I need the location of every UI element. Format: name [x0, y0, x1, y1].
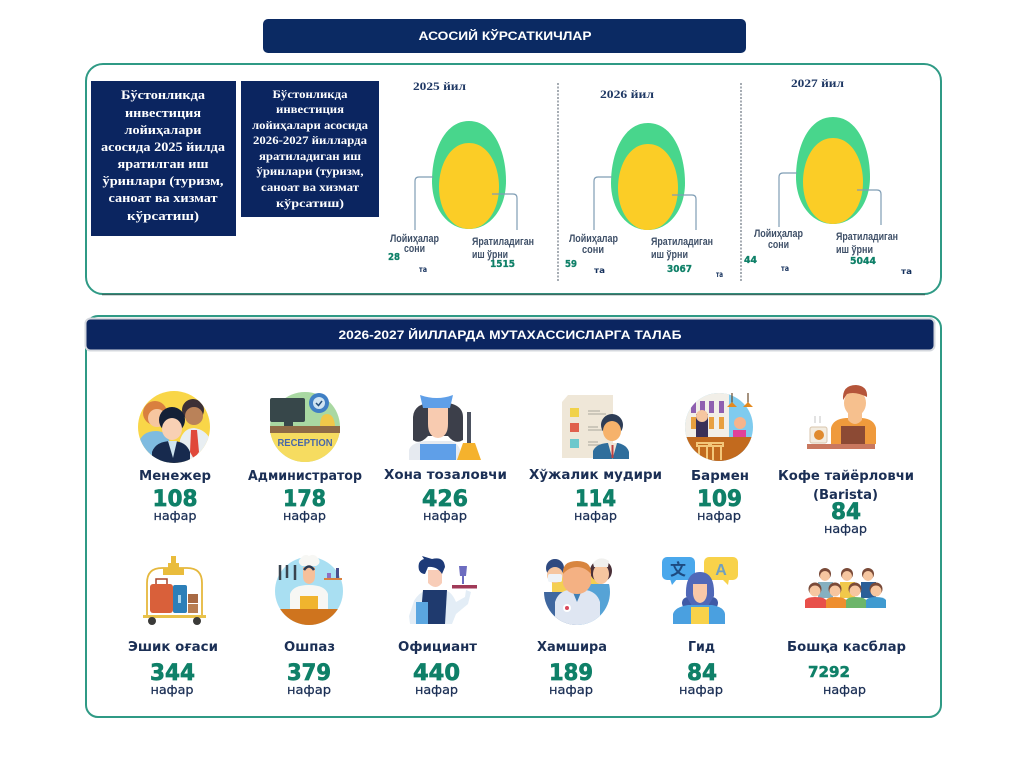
- label: Администратор: [248, 469, 362, 484]
- chart: 2026: 2026 йил: [600, 87, 654, 101]
- label: second line: (Barista): [813, 488, 878, 503]
- count: 426: [422, 487, 468, 512]
- label: Официант: [398, 640, 477, 655]
- unit: нафар: [287, 683, 331, 697]
- text box: 2025 jobs created: яратилган иш: [118, 156, 209, 171]
- card: housekeeper: [384, 395, 507, 523]
- card: manager: [138, 391, 212, 523]
- card: doorman: [128, 556, 218, 697]
- icon: translator: A: [715, 562, 727, 579]
- text box: 2026-2027 jobs planned: кўрсатиш): [276, 196, 344, 210]
- label: Хўжалик мудири: [529, 468, 662, 483]
- icon: managers: [138, 391, 210, 463]
- chart: 2026: сони: [582, 244, 604, 256]
- unit: нафар: [823, 683, 866, 697]
- chart: 2027: Яратиладиган: [836, 231, 898, 243]
- chart: 2026: иш ўрни: [651, 249, 688, 261]
- card: guide: [662, 556, 738, 697]
- count: 108: [152, 487, 198, 512]
- chart: 2027: 2027 йил: [791, 76, 844, 90]
- title bar: [263, 19, 746, 53]
- unit: нафар: [423, 509, 467, 523]
- chart: 2025: 28: [388, 252, 400, 263]
- panel: specialist demand: [86, 316, 941, 717]
- chart: 2025: та: [419, 265, 427, 274]
- count: 189: [549, 661, 593, 686]
- unit: нафар: [283, 509, 326, 523]
- icon: chef: [275, 555, 343, 627]
- text box: 2026-2027 jobs planned: [241, 81, 379, 217]
- chart: 2025: [388, 79, 534, 274]
- chart: 2026: Яратиладиган: [651, 236, 713, 248]
- card: barista: [778, 385, 914, 536]
- card: cook: [275, 555, 343, 697]
- icon: translator: [662, 556, 738, 624]
- section header: [86, 318, 934, 350]
- chart: 2026: 3067: [667, 264, 692, 275]
- unit: нафар: [549, 683, 593, 697]
- unit: нафар: [150, 683, 194, 697]
- text box: 2026-2027 jobs planned: инвестиция: [276, 102, 345, 116]
- card: household manager: [529, 395, 662, 523]
- count: 109: [697, 487, 742, 512]
- label: Менежер: [139, 469, 211, 484]
- card: waiter: [398, 556, 477, 697]
- chart: 2025: иш ўрни: [472, 249, 508, 261]
- chart: 2026: 59: [565, 259, 577, 270]
- chart: 2025: 2025 йил: [413, 79, 466, 93]
- section header: 2026-2027 ЙИЛЛАРДА МУТАХАССИСЛАРГА ТАЛАБ: [338, 327, 682, 342]
- chart: 2027: 5044: [850, 256, 876, 267]
- chart: 2027: сони: [768, 239, 789, 251]
- card: nurse: [537, 558, 612, 697]
- chart: 2027: та: [901, 267, 912, 276]
- text box: 2026-2027 jobs planned: лойиҳалари асосида: [252, 118, 368, 132]
- text box: 2025 jobs created: асосида 2025 йилда: [101, 139, 226, 154]
- icon: barista with coffee: [807, 385, 876, 449]
- label: Гид: [688, 640, 715, 655]
- text box: 2025 jobs created: лойиҳалари: [124, 122, 202, 137]
- icon: bar counter: [685, 393, 753, 463]
- text box: 2025 jobs created: ўринлари (туризм,: [102, 173, 224, 188]
- chart: 2027: та: [781, 264, 789, 273]
- icon: group of people: [805, 568, 886, 608]
- label: Эшик оғаси: [128, 640, 218, 655]
- unit: нафар: [415, 683, 458, 697]
- icon: luggage cart: [143, 556, 206, 625]
- chart: 2027: иш ўрни: [836, 244, 873, 256]
- panel: job creation indicators: [86, 64, 941, 294]
- icon: translator: 文: [670, 556, 686, 580]
- label: Хамшира: [537, 640, 607, 655]
- unit: нафар: [574, 509, 617, 523]
- text box: 2026-2027 jobs planned: ўринлари (туризм,: [256, 164, 364, 178]
- text box: 2025 jobs created: [91, 81, 236, 236]
- card: other professions: [787, 568, 906, 697]
- label: Бармен: [691, 469, 749, 484]
- chart: 2026: [565, 87, 723, 279]
- chart: 2026: Лойиҳалар: [569, 233, 618, 245]
- text box: 2025 jobs created: инвестиция: [125, 105, 201, 120]
- count: 7292: [808, 663, 850, 681]
- card: administrator: [248, 392, 362, 523]
- text box: 2026-2027 jobs planned: Бўстонликда: [272, 87, 348, 101]
- chart: 2025: Яратиладиган: [472, 236, 534, 248]
- count: 114: [575, 487, 616, 512]
- chart: 2027: Лойиҳалар: [754, 228, 803, 240]
- card: barman: [685, 393, 753, 523]
- count: 84: [687, 661, 717, 686]
- icon: waiter with tray: [409, 556, 477, 624]
- icon: reception desk: RECEPTION: [278, 438, 332, 449]
- chart: 2025: Лойиҳалар: [390, 233, 439, 245]
- title bar: АСОСИЙ КЎРСАТКИЧЛАР: [418, 28, 592, 43]
- chart: 2025: сони: [404, 243, 425, 255]
- unit: нафар: [824, 522, 867, 536]
- chart: 2025: 1515: [490, 259, 515, 270]
- text box: 2026-2027 jobs planned: саноат ва хизмат: [261, 180, 359, 194]
- label: Ошпаз: [284, 640, 335, 655]
- count: 178: [283, 487, 326, 512]
- unit: нафар: [679, 683, 723, 697]
- count: 440: [413, 661, 460, 686]
- text box: 2025 jobs created: саноат ва хизмат: [108, 190, 218, 205]
- chart: 2027: 44: [744, 255, 757, 266]
- text box: 2025 jobs created: кўрсатиш): [127, 208, 199, 223]
- label: Бошқа касблар: [787, 640, 906, 655]
- icon: manager with checklist: [562, 395, 629, 459]
- label: Кофе тайёрловчи: [778, 469, 914, 484]
- icon: medical staff: [544, 558, 612, 626]
- label: Хона тозаловчи: [384, 468, 507, 483]
- chart: 2027: [744, 76, 912, 276]
- text box: 2026-2027 jobs planned: яратиладиган иш: [259, 149, 361, 163]
- text box: 2025 jobs created: Бўстонликда: [121, 87, 206, 102]
- count: 379: [287, 661, 331, 686]
- chart: 2026: та: [594, 266, 605, 275]
- unit: нафар: [697, 509, 741, 523]
- chart: 2026: та: [716, 270, 723, 279]
- icon: cleaner with broom: [409, 395, 481, 460]
- text box: 2026-2027 jobs planned: 2026-2027 йилларда: [253, 133, 367, 147]
- unit: нафар: [154, 509, 196, 523]
- count: 84: [831, 500, 861, 525]
- count: 344: [150, 661, 195, 686]
